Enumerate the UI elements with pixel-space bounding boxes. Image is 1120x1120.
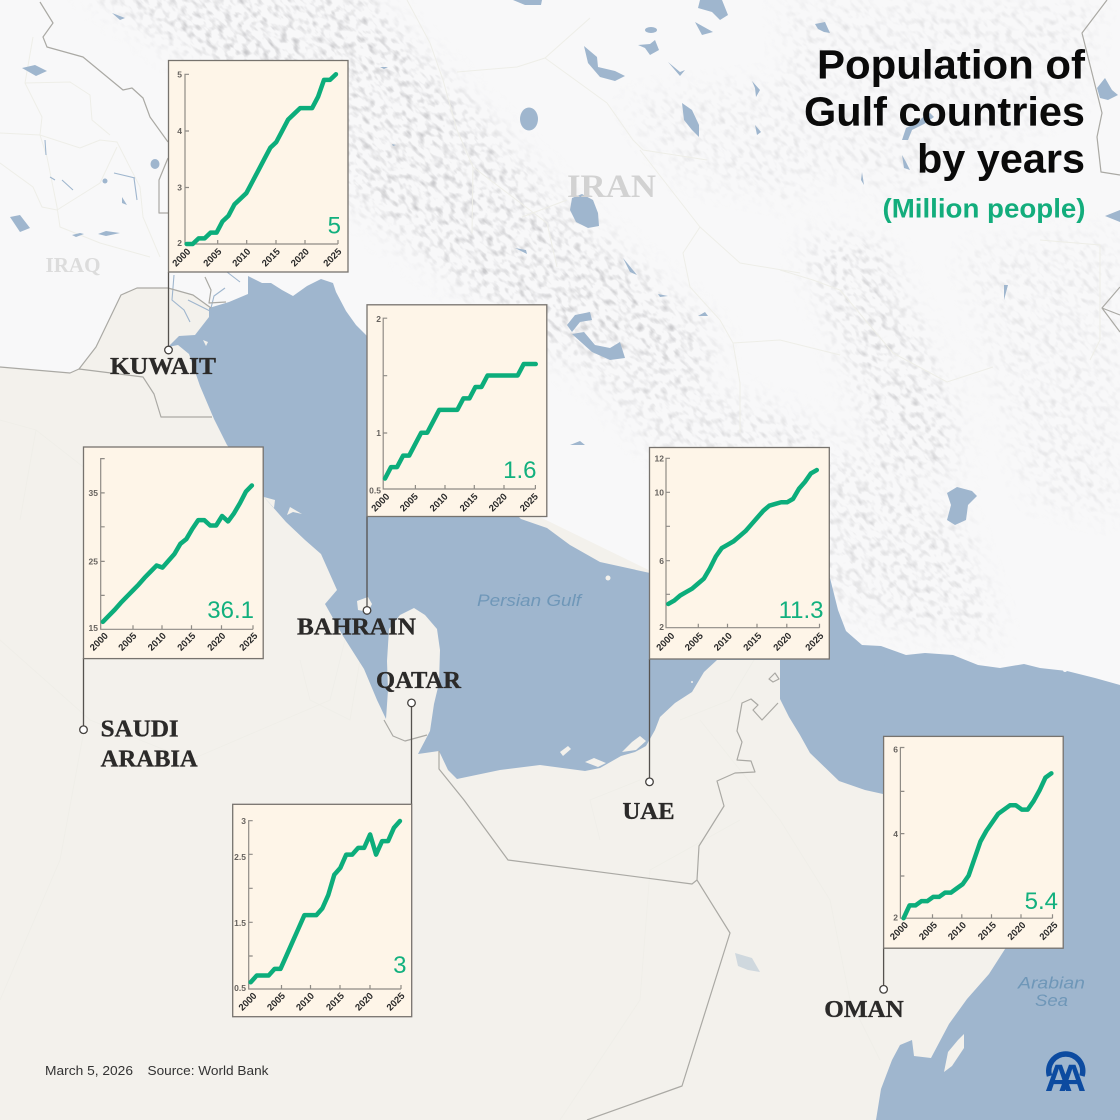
y axis labels: 6 bbox=[893, 744, 898, 754]
callout: Oman bbox=[824, 948, 904, 1023]
x axis labels: 2025 bbox=[1038, 919, 1061, 943]
x axis labels: 2005 bbox=[917, 919, 940, 943]
y axis labels bbox=[234, 816, 246, 993]
title: by years bbox=[917, 136, 1085, 182]
map: sea bbox=[168, 276, 1120, 1120]
x axis labels: 2000 bbox=[170, 246, 193, 269]
title: Gulf countries bbox=[804, 88, 1085, 134]
x axis labels: 2020 bbox=[487, 491, 510, 514]
x axis labels: 2020 bbox=[1006, 920, 1028, 943]
title bbox=[804, 42, 1085, 182]
leader line bbox=[410, 707, 412, 804]
y axis labels: 12 bbox=[655, 454, 664, 464]
x axis labels bbox=[237, 990, 408, 1013]
callout: UAE bbox=[622, 659, 674, 825]
population line bbox=[668, 470, 817, 604]
x axis labels: 2020 bbox=[289, 246, 312, 269]
x axis labels: 2015 bbox=[741, 630, 765, 654]
population line bbox=[385, 364, 536, 479]
y axis labels: 4 bbox=[893, 829, 898, 839]
x axis labels: 2010 bbox=[230, 246, 253, 269]
latest value: 3 bbox=[393, 952, 406, 979]
x axis labels: 2005 bbox=[683, 630, 706, 654]
panel: Kuwait chart bbox=[168, 60, 348, 272]
x axis labels: 2010 bbox=[146, 631, 169, 654]
leader line bbox=[82, 658, 84, 726]
map: faint roads on the Arabian peninsula bbox=[0, 420, 880, 1120]
x axis labels: 2005 bbox=[265, 990, 288, 1013]
map label: Iran: IRAN bbox=[567, 169, 656, 205]
x axis labels: 2020 bbox=[353, 991, 376, 1013]
x axis labels: 2015 bbox=[324, 990, 347, 1013]
x axis labels: 2020 bbox=[771, 631, 794, 654]
x axis labels: 2000 bbox=[88, 631, 111, 654]
country label: QATAR bbox=[376, 668, 462, 694]
panel: Saudi Arabia chart bbox=[84, 447, 263, 659]
y axis labels: 6 bbox=[659, 556, 664, 566]
country label: OMAN bbox=[824, 997, 904, 1023]
x axis labels: 2000 bbox=[237, 991, 259, 1013]
marker bbox=[646, 778, 653, 786]
map label: Arabian Sea: Arabian bbox=[1017, 974, 1085, 992]
subtitle: (Million people) bbox=[882, 194, 1086, 224]
x axis labels: 2000 bbox=[888, 920, 911, 943]
x axis labels: 2010 bbox=[428, 491, 451, 514]
latest value: 36.1 bbox=[207, 597, 254, 624]
x axis labels: 2000 bbox=[654, 631, 677, 654]
map: Arabian peninsula land bbox=[0, 288, 1120, 1120]
map label: Arabian Sea bbox=[1017, 974, 1085, 1010]
x axis labels: 2005 bbox=[398, 491, 421, 514]
y axis labels: 0.5 bbox=[234, 983, 246, 993]
map: rivers bbox=[45, 140, 240, 322]
panel: Qatar chart bbox=[233, 804, 412, 1017]
y axis labels: 10 bbox=[655, 488, 664, 498]
latest value: 5.4 bbox=[1025, 888, 1058, 915]
population line bbox=[904, 773, 1051, 918]
y axis labels: 25 bbox=[89, 556, 98, 566]
callout: Qatar bbox=[376, 668, 462, 804]
x axis labels: 2005 bbox=[116, 630, 140, 654]
y axis labels bbox=[893, 744, 898, 922]
x axis labels: 2010 bbox=[946, 920, 969, 943]
x axis labels: 2025 bbox=[321, 246, 345, 269]
x axis labels: 2015 bbox=[976, 919, 999, 943]
y axis labels: 1.5 bbox=[234, 918, 246, 928]
map: islands bbox=[203, 340, 1067, 1072]
x axis labels: 2010 bbox=[712, 631, 735, 654]
x axis labels bbox=[888, 919, 1061, 943]
marker bbox=[408, 699, 415, 707]
panel: UAE chart bbox=[650, 448, 829, 659]
x axis labels bbox=[88, 630, 261, 654]
country label: SAUDI bbox=[101, 716, 179, 742]
y axis labels: 3 bbox=[177, 182, 182, 192]
y axis labels bbox=[655, 454, 664, 632]
x axis labels: 2025 bbox=[237, 630, 261, 654]
latest value: 11.3 bbox=[779, 597, 824, 624]
x axis labels: 2025 bbox=[385, 990, 408, 1013]
x axis labels: 2005 bbox=[201, 246, 225, 269]
y axis labels: 2.5 bbox=[234, 852, 246, 862]
y axis labels: 2 bbox=[376, 314, 381, 324]
x axis labels: 2000 bbox=[369, 491, 392, 514]
x axis labels bbox=[654, 630, 827, 654]
x axis labels: 2010 bbox=[294, 991, 317, 1013]
y axis labels bbox=[89, 488, 98, 633]
footer: date and source bbox=[45, 1063, 269, 1078]
latest value: 1.6 bbox=[503, 457, 536, 484]
map label: Arabian Sea: Sea bbox=[1035, 991, 1068, 1010]
callout: Saudi Arabia bbox=[80, 658, 198, 772]
marker bbox=[880, 986, 887, 993]
country label: ARABIA bbox=[101, 746, 198, 772]
y axis labels: 0.5 bbox=[369, 486, 381, 496]
footer: date and source: March 5, 2026 bbox=[45, 1063, 133, 1078]
marker bbox=[363, 607, 371, 614]
x axis labels: 2015 bbox=[175, 630, 199, 654]
footer: date and source: Source: World Bank bbox=[148, 1063, 269, 1078]
x axis labels bbox=[369, 491, 541, 514]
callout: Kuwait bbox=[110, 272, 216, 380]
panel: Oman chart bbox=[884, 736, 1063, 948]
x axis labels: 2025 bbox=[518, 491, 541, 514]
map label: Persian Gulf: Persian Gulf bbox=[477, 591, 584, 610]
x axis labels: 2015 bbox=[260, 246, 283, 269]
country label: KUWAIT bbox=[110, 354, 216, 380]
map: roads in Iran and Iraq bbox=[0, 0, 1100, 433]
y axis labels: 2 bbox=[177, 238, 182, 248]
population line bbox=[251, 821, 400, 982]
leader line bbox=[648, 659, 650, 778]
x axis labels: 2025 bbox=[803, 630, 827, 654]
latest value: 5 bbox=[328, 212, 341, 240]
y axis labels: 2 bbox=[659, 622, 664, 632]
y axis labels: 15 bbox=[89, 623, 98, 633]
country label bbox=[101, 716, 198, 772]
y axis labels: 35 bbox=[89, 488, 98, 498]
marker bbox=[80, 726, 87, 734]
map label: Iraq: IRAQ bbox=[46, 253, 100, 277]
population line bbox=[187, 74, 336, 244]
y axis labels: 5 bbox=[177, 69, 182, 79]
title: Population of bbox=[817, 42, 1085, 88]
leader line bbox=[366, 516, 368, 606]
leader line bbox=[168, 272, 170, 346]
callout: Bahrain bbox=[297, 516, 417, 641]
country label: UAE bbox=[622, 799, 674, 825]
y axis labels: 3 bbox=[241, 816, 246, 826]
marker bbox=[165, 346, 172, 354]
y axis labels: 2 bbox=[893, 912, 898, 922]
y axis labels: 4 bbox=[177, 126, 182, 136]
y axis labels: 1 bbox=[376, 428, 381, 438]
y axis labels bbox=[369, 314, 381, 496]
panel: Bahrain chart bbox=[367, 305, 547, 516]
population line bbox=[103, 485, 252, 622]
y axis labels bbox=[177, 69, 182, 248]
map: mountain relief texture bbox=[100, 0, 1118, 640]
icon: AA logo: AA bbox=[1045, 1058, 1086, 1100]
x axis labels: 2015 bbox=[458, 491, 481, 514]
leader line bbox=[883, 948, 885, 986]
x axis labels: 2020 bbox=[205, 631, 228, 654]
country label: BAHRAIN bbox=[297, 615, 417, 641]
x axis labels bbox=[170, 246, 345, 269]
